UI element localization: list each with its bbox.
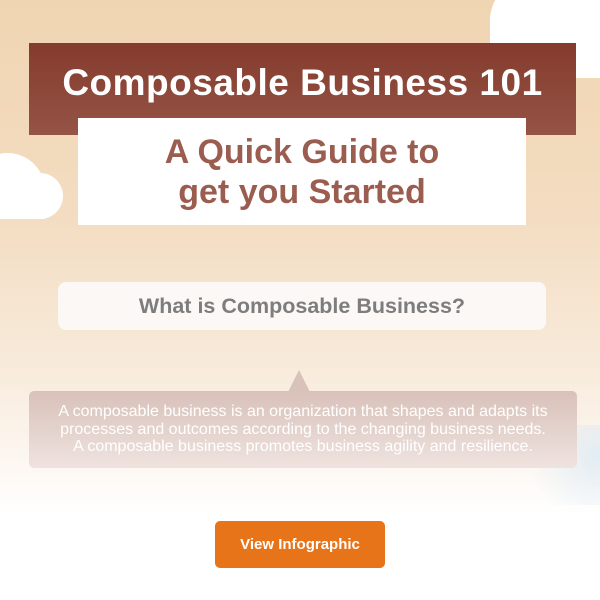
button: View Infographic (240, 536, 360, 553)
cloud: left (0, 153, 63, 219)
question heading: What is Composable Business? (139, 294, 465, 318)
callout: definition: A composable business promotes business agility and resilience. (73, 438, 533, 455)
subtitle box: get you Started (178, 173, 426, 211)
title banner (29, 43, 576, 135)
button (215, 521, 385, 568)
callout: definition: A composable business is an organization that shapes and adapts its (58, 403, 548, 420)
callout: definition: processes and outcomes according to the changing business needs. (60, 420, 546, 438)
subtitle box (78, 118, 526, 225)
subtitle box: A Quick Guide to (165, 133, 439, 171)
question heading (58, 282, 546, 330)
cloud: faint bottom right (520, 425, 600, 505)
title banner: Composable Business 101 (62, 62, 543, 103)
cloud: top right (490, 0, 600, 78)
callout: definition (29, 370, 577, 468)
